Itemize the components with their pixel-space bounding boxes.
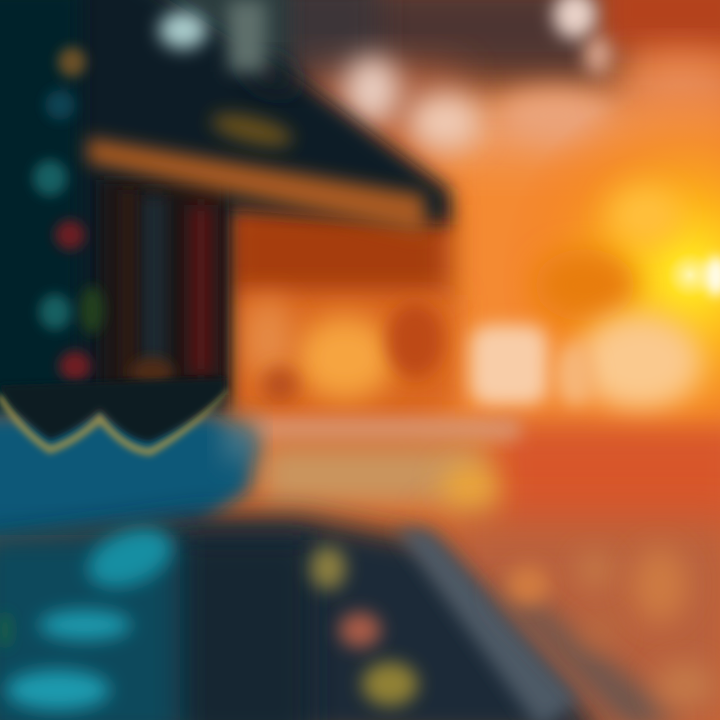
dark building facade [0, 0, 450, 415]
coloured lights on building [33, 47, 174, 387]
warm interior below roof [225, 205, 455, 410]
teal glowing lights at bottom left [0, 517, 181, 720]
teal awning with scalloped gold trim [0, 378, 255, 545]
dark lower street [0, 515, 680, 720]
sea and lower orange band [250, 418, 720, 720]
sun glow [500, 85, 720, 465]
white clouds [344, 0, 720, 152]
pale reflections on horizon [470, 314, 702, 410]
bokeh market lights [310, 546, 715, 707]
dark clouds at top [260, 0, 720, 130]
